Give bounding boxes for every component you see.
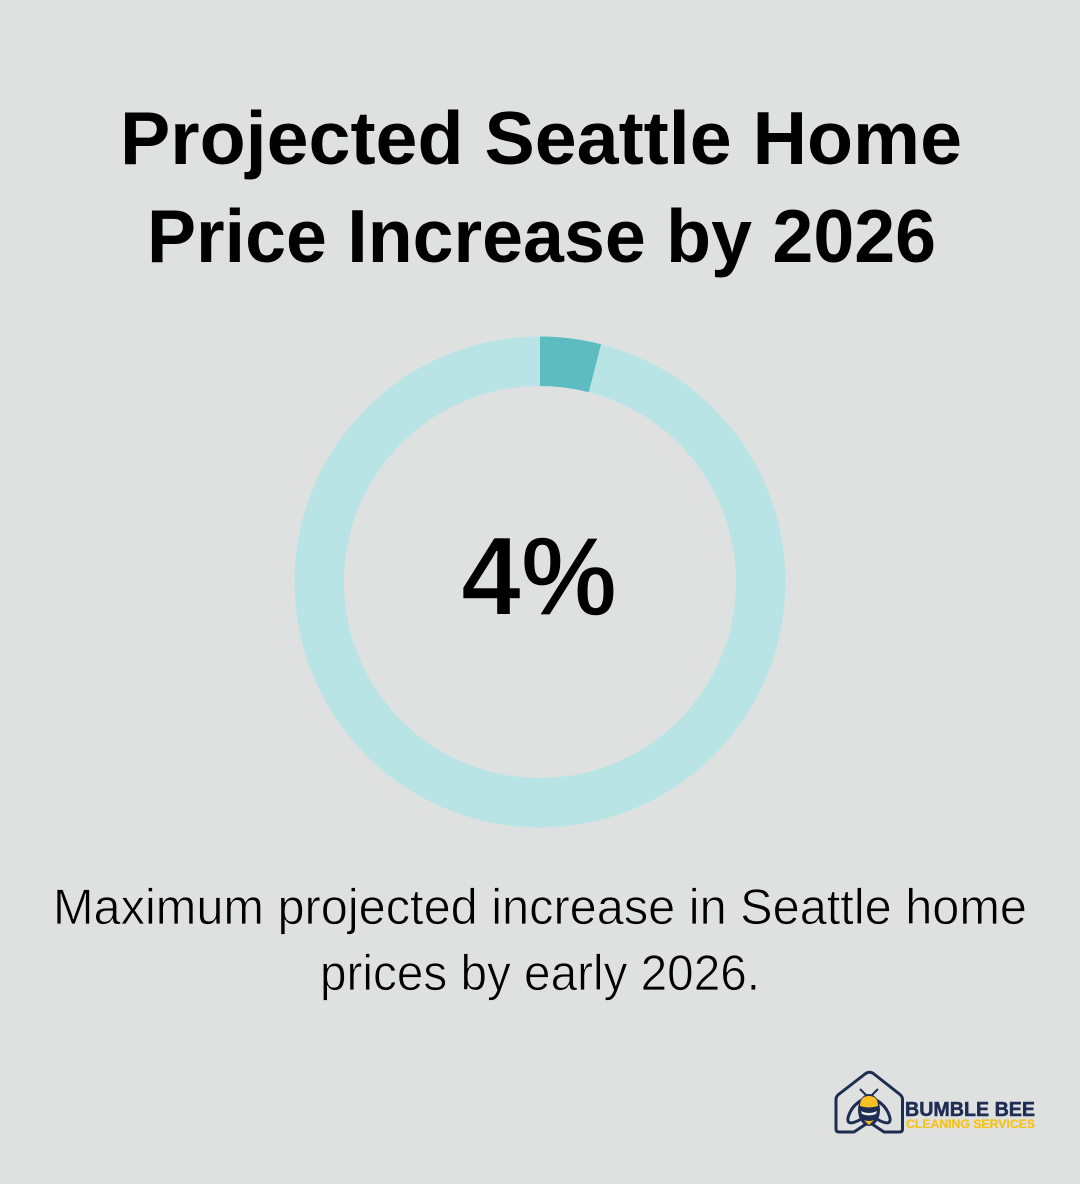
donut value segment: 4% [540,336,601,392]
logo: Bumble Bee Cleaning Services [836,1072,1035,1132]
description text: Maximum projected increase in Seattle home [53,879,1027,935]
logo tagline: CLEANING SERVICES [906,1117,1035,1131]
donut track [319,361,761,803]
donut chart [319,336,761,803]
icon: house with bee [836,1072,902,1132]
logo wordmark: BUMBLE BEE [905,1099,1035,1121]
description text [53,879,1027,1001]
title [120,96,962,278]
description text: prices by early 2026. [320,945,760,1001]
title: Projected Seattle Home [120,96,962,180]
title: Price Increase by 2026 [147,194,936,278]
center value: 4% [461,514,617,639]
